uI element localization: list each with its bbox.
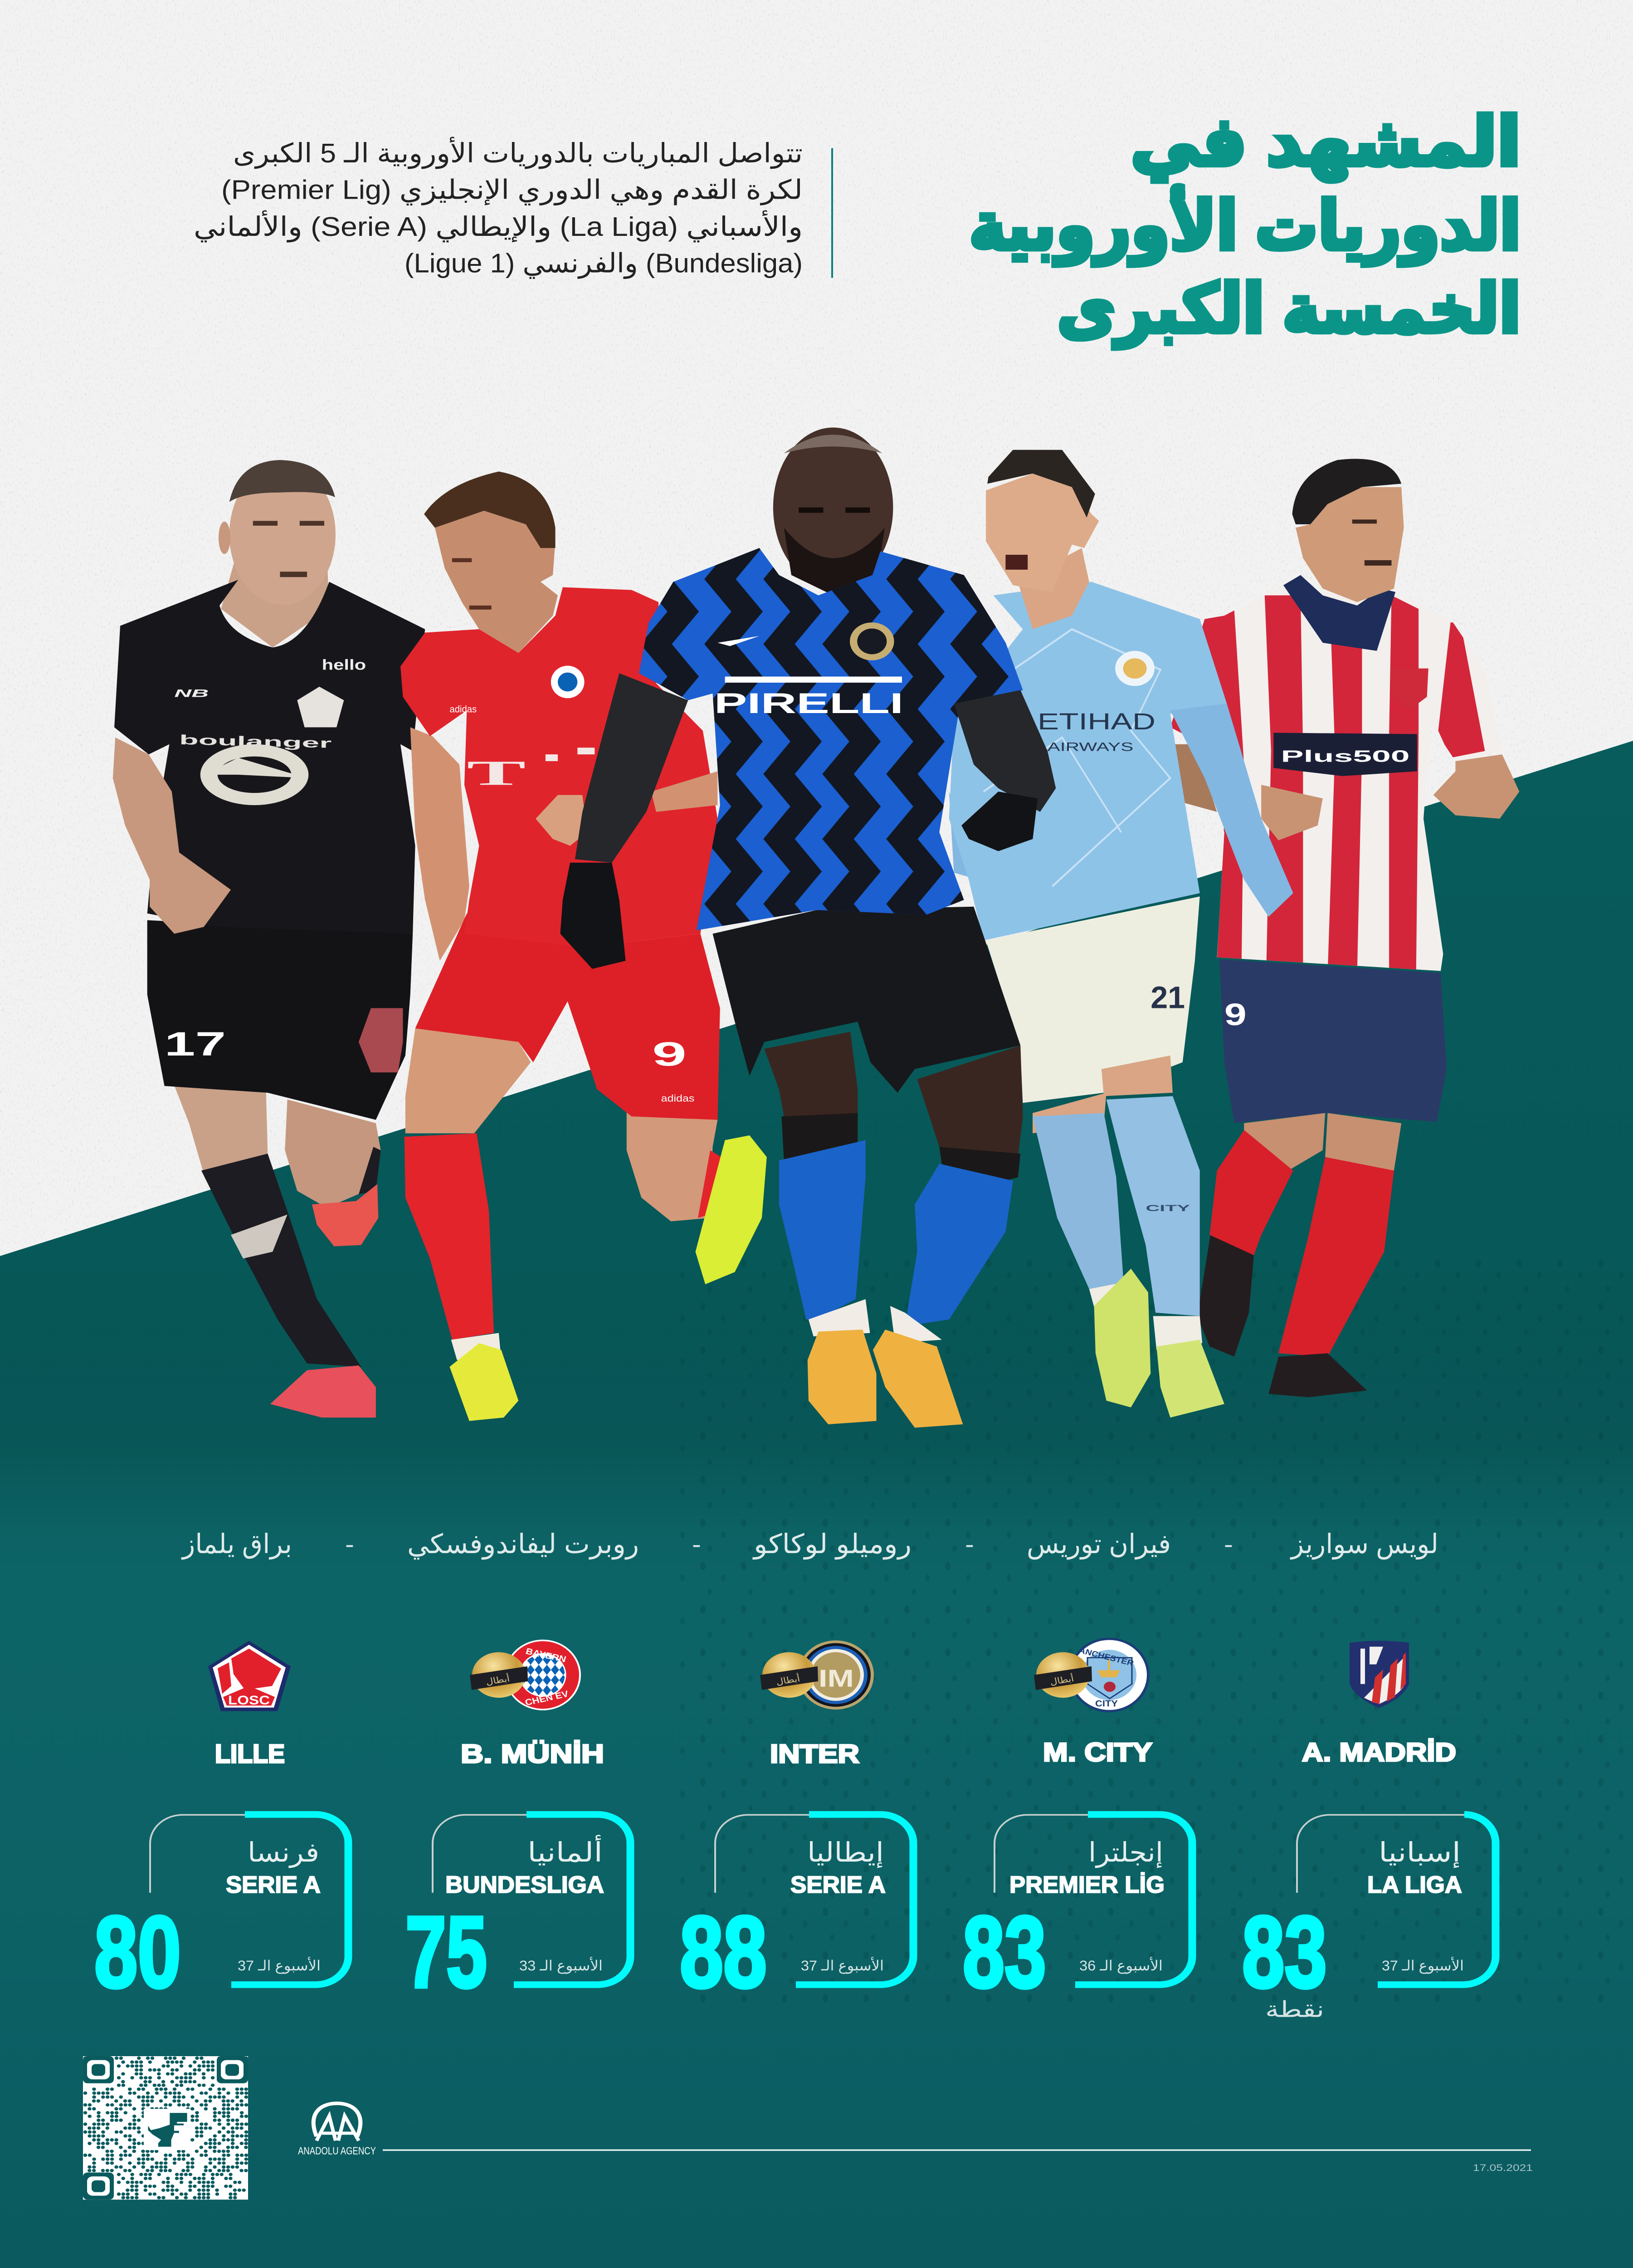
stat card: Inter: SERIE A (790, 1871, 886, 1898)
player: Ferran Torres: AIRWAYS (1048, 740, 1133, 753)
player: Ferran Torres (949, 450, 1293, 1418)
badge: Inter with champion medal (760, 1640, 874, 1710)
team name labels: M. CITY (1043, 1738, 1152, 1767)
badge: Atletico Madrid (1350, 1641, 1409, 1708)
player names row: - (1224, 1531, 1233, 1557)
stat card: Lille (94, 1814, 348, 2009)
Anadolu Agency logo: ANADOLU AGENCY (298, 2145, 376, 2157)
stat card: Manchester City: الأسبوع الـ 36 (1079, 1957, 1163, 1974)
stat card: Bayern: BUNDESLIGA (445, 1871, 604, 1898)
player: Burak Yilmaz: NB (174, 688, 209, 699)
player: Ferran Torres: 21 (1150, 980, 1185, 1015)
player: Robert Lewandowski: T (467, 754, 526, 792)
intro text block: (Bundesliga) والفرنسي (Ligue 1) (405, 249, 803, 279)
title: الخمسة الكبرى (1057, 271, 1521, 349)
badge: Lille: LOSC (228, 1694, 270, 1707)
footer rule (383, 2149, 1531, 2151)
stat card: Inter: 88 (680, 1896, 767, 2009)
stat card: Manchester City (963, 1814, 1192, 2009)
badge: Manchester City with champion medal: CITY (1095, 1699, 1118, 1709)
stat card: Inter (680, 1814, 913, 2009)
badge: Bayern with champion medal (470, 1640, 580, 1710)
player: Luis Suarez (1170, 459, 1519, 1397)
team name labels: B. MÜNİH (461, 1740, 604, 1769)
stat card: Atletico Madrid: الأسبوع الـ 37 (1382, 1957, 1464, 1974)
player: Robert Lewandowski: adidas (661, 1093, 694, 1104)
player names row: - (692, 1531, 701, 1557)
player names row: - (965, 1531, 974, 1557)
badge: Manchester City with champion medal: ANCHESTER (1078, 1646, 1135, 1668)
player names row: لويس سواريز (1290, 1529, 1438, 1560)
player names row: - (345, 1531, 354, 1557)
badge: Bayern with champion medal: CHEN EV (524, 1689, 570, 1708)
stat card: Lille: SERIE A (226, 1871, 321, 1898)
background: teal droplet texture (680, 1476, 1623, 2002)
player: Burak Yilmaz: boulanger (179, 732, 332, 751)
player names row (181, 1529, 1438, 1560)
stat card: Bayern (405, 1814, 630, 2009)
stat card: Lille: الأسبوع الـ 37 (238, 1957, 321, 1974)
intro text block: تتواصل المباريات بالدوريات الأوروبية الـ 5 الكبرى (233, 137, 803, 169)
stat card: Atletico Madrid (1242, 1814, 1496, 2009)
QR code (83, 2056, 248, 2200)
player: Robert Lewandowski: adidas (449, 704, 477, 714)
date: 17.05.2021 (1473, 2162, 1533, 2173)
intro text block: والأسباني (La Liga) والإيطالي (Serie A) والألماني (194, 210, 803, 243)
badge: Bayern with champion medal: أبطال (485, 1672, 511, 1687)
player: Luis Suarez: Plus500 (1281, 747, 1410, 766)
badge: Manchester City with champion medal: أبطال (1049, 1672, 1075, 1687)
stat card: Lille: فرنسا (248, 1838, 319, 1868)
badge: Manchester City with champion medal (1034, 1639, 1148, 1711)
stat card: Lille: 80 (94, 1896, 181, 2009)
player: Luis Suarez: 9 (1224, 997, 1247, 1032)
stat card: Bayern: 75 (405, 1896, 487, 2009)
intro text block (194, 137, 803, 279)
player: Romelu Lukaku (560, 428, 1056, 1428)
player names row: روبرت ليفاندوفسكي (407, 1529, 639, 1560)
stat card: Inter: إيطاليا (807, 1838, 884, 1868)
badge: Lille (208, 1641, 291, 1711)
title (969, 104, 1521, 349)
player: Burak Yilmaz: hello (322, 657, 366, 674)
player: Robert Lewandowski: 9 (652, 1035, 687, 1073)
stat card: Atletico Madrid: LA LIGA (1367, 1871, 1462, 1898)
stat card: Manchester City: PREMIER LİG (1009, 1871, 1165, 1898)
stat card: Atletico Madrid: إسبانيا (1379, 1838, 1461, 1868)
Anadolu Agency logo (298, 2103, 376, 2157)
background: paper grain (0, 0, 1633, 1257)
background: teal diagonal panel (0, 741, 1633, 2268)
stat card: Manchester City: إنجلترا (1088, 1838, 1163, 1868)
badge: Bayern with champion medal: BAYERN (525, 1647, 567, 1664)
stat card: Inter: الأسبوع الـ 37 (801, 1957, 884, 1974)
intro divider line (831, 148, 833, 278)
background: ground shadow (0, 1316, 1633, 1533)
player names row: روميلو لوكاكو (752, 1529, 912, 1560)
points label: نقطة (1265, 1998, 1324, 2022)
player names row: براق يلماز (181, 1529, 292, 1560)
player names row: فيران توريس (1027, 1529, 1171, 1560)
player: Burak Yilmaz (113, 460, 425, 1418)
team name labels: LILLE (215, 1740, 285, 1769)
player: Ferran Torres: ETIHAD (1038, 709, 1155, 734)
team name labels: A. MADRİD (1302, 1738, 1456, 1767)
player: Burak Yilmaz: 17 (165, 1025, 226, 1063)
badge: Inter with champion medal: IM (819, 1665, 854, 1692)
stat card: Bayern: الأسبوع الـ 33 (519, 1957, 603, 1974)
player: Ferran Torres: CITY (1146, 1203, 1191, 1213)
badge: Inter with champion medal: أبطال (775, 1672, 801, 1687)
team name labels: INTER (770, 1740, 859, 1769)
team name labels (215, 1738, 1456, 1769)
player: Robert Lewandowski (400, 472, 767, 1421)
player: Romelu Lukaku: PIRELLI (714, 687, 903, 719)
title: المشهد في (1131, 104, 1521, 182)
stat card: Atletico Madrid: 83 (1242, 1896, 1327, 2009)
stat card: Manchester City: 83 (963, 1896, 1046, 2009)
intro text block: لكرة القدم وهي الدوري الإنجليزي (Premier Lig) (221, 175, 803, 205)
stat card: Bayern: ألمانيا (527, 1835, 603, 1867)
